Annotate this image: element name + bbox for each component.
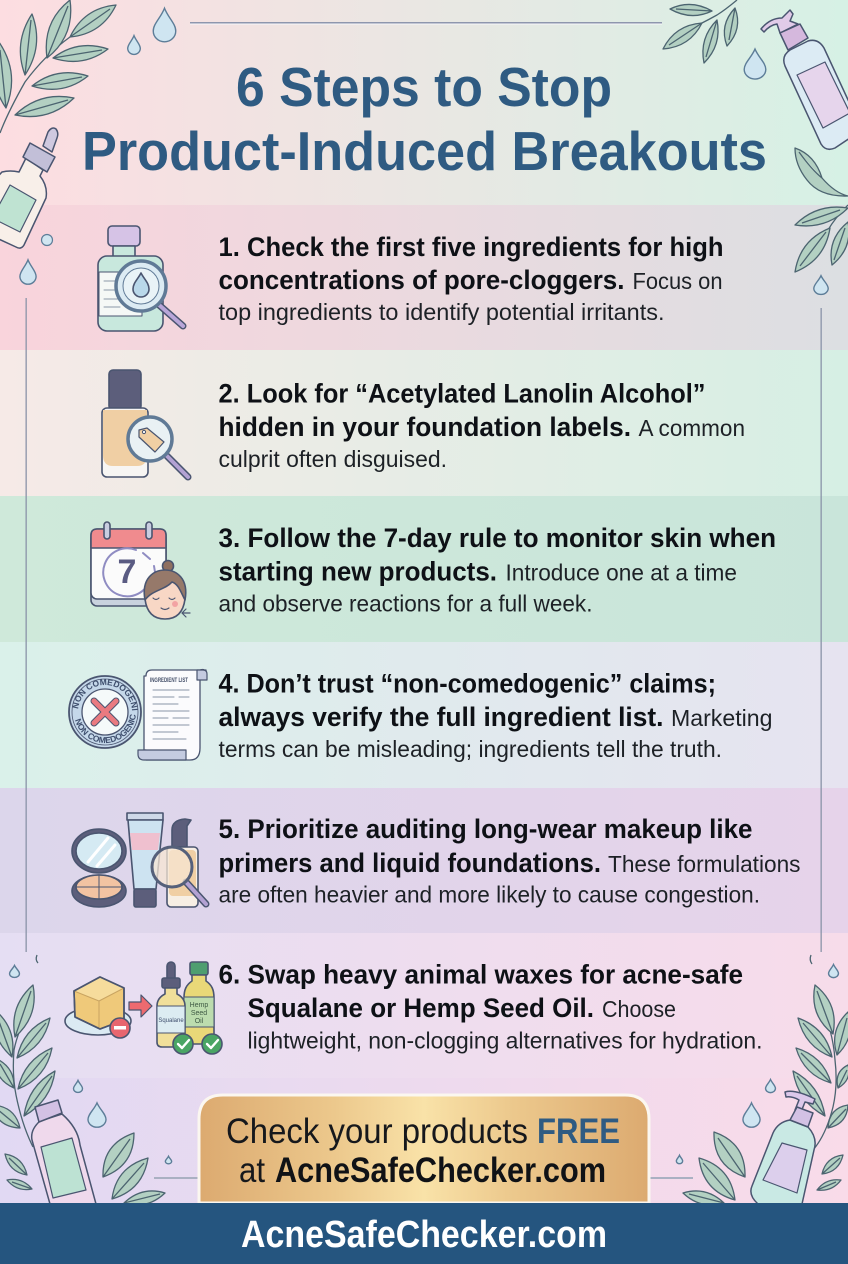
step 3 text	[218, 523, 776, 616]
icon: stamp and ingredient list: INGREDIENT LIST	[150, 678, 188, 684]
icon: calendar with 7 and face: 7	[118, 553, 136, 591]
step 6 text: Choose	[602, 996, 676, 1022]
step 4 text	[218, 668, 772, 762]
call to action box	[199, 1095, 649, 1203]
decoration: right leaves and drops	[744, 49, 848, 294]
icon: stamp and ingredient list: NON COMEDOGENIC	[75, 714, 136, 744]
decoration: bottom-left foliage and bottle	[0, 955, 172, 1205]
icon: calendar with 7 and face	[91, 522, 190, 619]
band: step 6 background	[0, 933, 848, 1078]
footer bar: AcneSafeChecker.com	[241, 1214, 607, 1256]
call to action box: Check your products	[226, 1112, 528, 1151]
decoration: top-right leaves	[663, 0, 738, 63]
decoration: top-left drops	[128, 8, 176, 54]
step 3 text: Introduce one at a time	[506, 560, 737, 586]
step 5 text: primers and liquid foundations.	[218, 848, 601, 878]
step 5 text: 5. Prioritize auditing long-wear makeup like	[218, 814, 752, 844]
step 5 text: These formulations	[608, 851, 800, 877]
step 6 text: 6. Swap heavy animal waxes for acne-safe	[218, 960, 743, 990]
step 6 text: Squalane or Hemp Seed Oil.	[248, 993, 594, 1023]
step 1 text: top ingredients to identify potential irritants.	[218, 299, 664, 325]
band: step 2 background	[0, 350, 848, 496]
title: 6 Steps to Stop	[236, 56, 612, 118]
step 6 text: lightweight, non-clogging alternatives for hydration.	[248, 1028, 762, 1054]
icon: butter block to squalane and hemp oil: Hemp	[190, 1002, 208, 1009]
step 1 text: concentrations of pore-cloggers.	[218, 265, 624, 295]
band: step 4 background	[0, 642, 848, 788]
icon: butter block to squalane and hemp oil: Seed	[191, 1010, 207, 1017]
step 6 text	[218, 960, 762, 1054]
footer bar	[0, 1203, 848, 1264]
step 1 text: Focus on	[632, 268, 722, 294]
step 4 text: Marketing	[671, 705, 772, 731]
band: step 1 background	[0, 205, 848, 350]
step 4 text: 4. Don’t trust “non-comedogenic” claims;	[218, 668, 716, 698]
band: step 3 background	[0, 496, 848, 642]
step 2 text: 2. Look for “Acetylated Lanolin Alcohol”	[218, 378, 706, 408]
decoration: top-left dropper bottle	[0, 128, 58, 248]
decoration: bottom-right foliage and bottle	[676, 955, 848, 1205]
icon: butter block to squalane and hemp oil: Oil	[195, 1018, 204, 1025]
step 3 text: and observe reactions for a full week.	[218, 590, 592, 616]
icon: bottle with magnifier	[98, 226, 183, 331]
step 2 text	[218, 378, 745, 472]
step 5 text	[218, 814, 800, 908]
step 3 text: 3. Follow the 7-day rule to monitor skin when	[218, 523, 776, 553]
step 1 text	[218, 232, 724, 325]
title	[82, 56, 767, 182]
call to action box: at	[239, 1151, 265, 1190]
step 2 text: culprit often disguised.	[218, 446, 447, 472]
step 5 text: are often heavier and more likely to cause congestion.	[218, 882, 760, 908]
step 1 text: 1. Check the first five ingredients for high	[218, 232, 724, 262]
band: step 5 background	[0, 788, 848, 933]
icon: compact, primer tube and foundation with magnifier	[72, 813, 206, 907]
decoration: top-left leaves	[0, 0, 116, 133]
icon: butter block to squalane and hemp oil: Squalane	[158, 1018, 184, 1024]
call to action box: FREE	[537, 1112, 620, 1151]
title: Product-Induced Breakouts	[82, 120, 767, 182]
step 2 text: hidden in your foundation labels.	[218, 412, 631, 442]
decoration: small drops left	[20, 234, 52, 284]
step 4 text: always verify the full ingredient list.	[218, 702, 664, 732]
icon: foundation with magnifier and tag	[102, 370, 188, 477]
step 4 text: terms can be misleading; ingredients tell the truth.	[218, 736, 722, 762]
step 2 text: A common	[638, 415, 745, 441]
call to action box: AcneSafeChecker.com	[275, 1151, 606, 1190]
icon: butter block to squalane and hemp oil	[65, 962, 222, 1054]
step 3 text: starting new products.	[218, 556, 497, 586]
decoration: top-right pump bottle	[761, 10, 848, 149]
icon: stamp and ingredient list	[68, 668, 208, 761]
